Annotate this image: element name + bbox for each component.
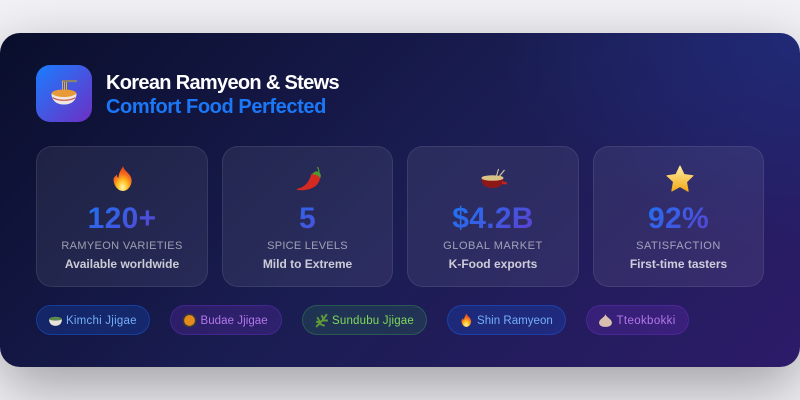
label: Budae Jjigae — [200, 314, 268, 326]
label: Kimchi Jjigae — [66, 314, 137, 326]
description: K-Food exports — [449, 256, 537, 270]
label: Sundubu Jjigae — [332, 314, 414, 326]
value: 5 — [299, 202, 316, 235]
tag: Kimchi Jjigae — [36, 305, 150, 335]
value — [239, 201, 376, 237]
stat card: spice levels — [222, 146, 393, 287]
value — [610, 201, 747, 237]
label: Tteokbokki — [616, 314, 676, 326]
stat card: ramyeon varieties — [36, 146, 208, 287]
tag: Tteokbokki — [586, 305, 689, 335]
icon: chili pepper — [296, 166, 321, 190]
icon: star — [666, 166, 694, 192]
value: 92% — [648, 202, 709, 235]
icon: garlic — [599, 314, 612, 327]
subtitle: Comfort Food Perfected — [106, 96, 326, 118]
tag: Budae Jjigae — [170, 305, 282, 335]
value — [53, 201, 191, 237]
stat card: global market — [407, 146, 579, 287]
value: $4.2B — [452, 202, 534, 235]
description: Mild to Extreme — [263, 256, 352, 270]
tag: Shin Ramyeon — [447, 305, 566, 335]
icon: stew — [182, 314, 196, 328]
stat card: satisfaction — [593, 146, 764, 287]
tag: Sundubu Jjigae — [302, 305, 427, 335]
label: RAMYEON VARIETIES — [61, 240, 183, 252]
title: Korean Ramyeon & Stews — [106, 72, 339, 94]
icon: fire — [114, 166, 132, 191]
icon: fondue pot — [482, 168, 507, 188]
label: SATISFACTION — [636, 240, 721, 252]
label: SPICE LEVELS — [267, 240, 348, 252]
value — [424, 201, 562, 237]
description: First-time tasters — [630, 256, 727, 270]
value: 120+ — [88, 202, 156, 235]
app icon: noodle bowl — [36, 65, 92, 122]
icon: fire — [461, 314, 472, 327]
label: GLOBAL MARKET — [443, 240, 543, 252]
icon: bowl — [49, 316, 62, 326]
description: Available worldwide — [65, 256, 179, 270]
icon: herb — [316, 314, 328, 328]
label: Shin Ramyeon — [477, 314, 553, 326]
